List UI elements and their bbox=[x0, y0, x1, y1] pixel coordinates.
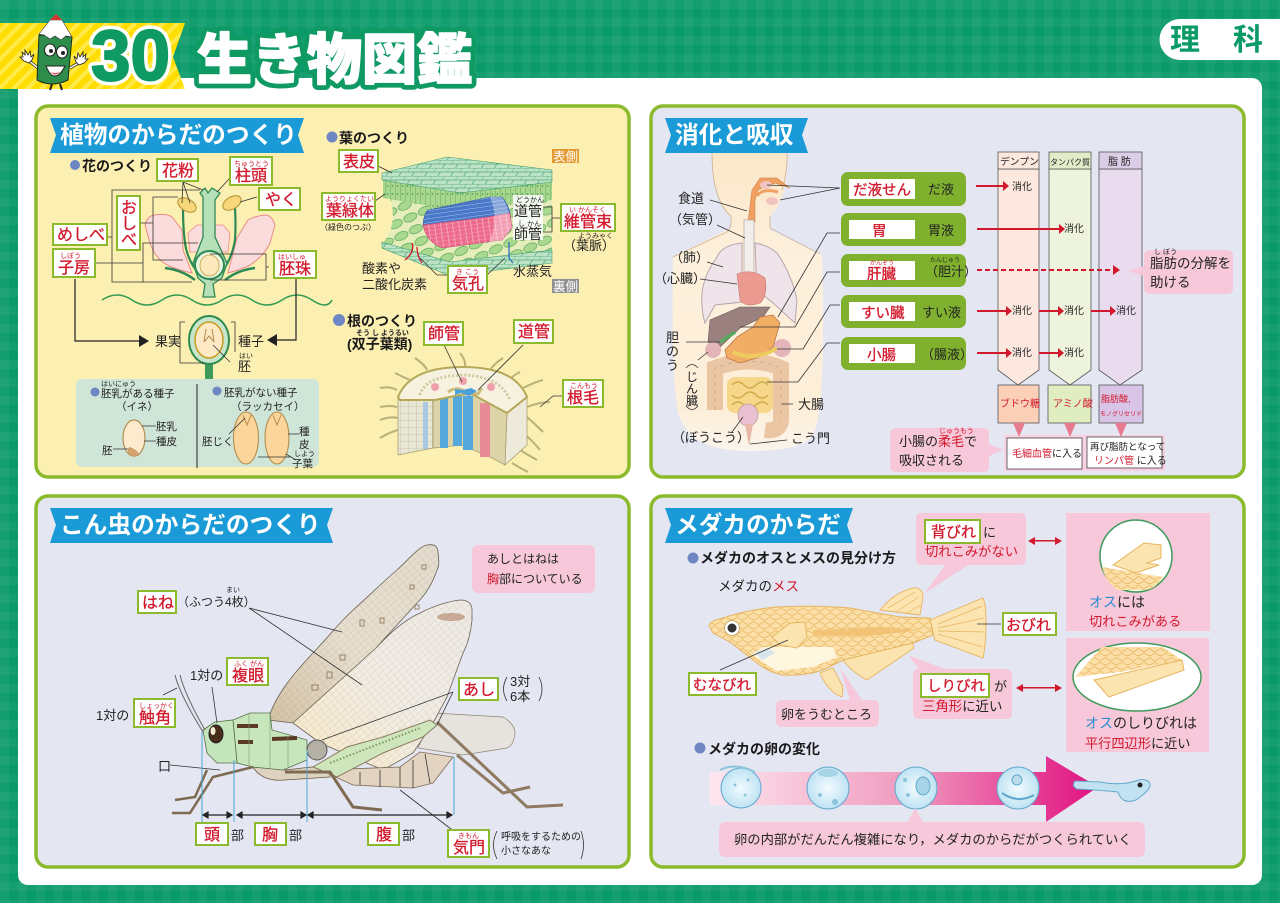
label: head segment: 部 bbox=[231, 828, 244, 843]
human body illustration bbox=[673, 153, 823, 451]
text: oxygen and CO2 bbox=[362, 261, 427, 292]
callout: egg laying spot: 卵をうむところ bbox=[781, 707, 872, 722]
column: starch bbox=[998, 152, 1040, 423]
subheading: leaf: 葉のつくり bbox=[339, 130, 409, 146]
column: fat: 脂 肪 bbox=[1108, 155, 1131, 168]
panel: seeds comparison: 胚 bbox=[102, 445, 113, 457]
label: wings bbox=[138, 591, 176, 613]
organ row: liver: かんぞう bbox=[870, 260, 894, 267]
text: usually four wings: まい bbox=[226, 586, 240, 594]
label: epidermis: 表皮 bbox=[343, 153, 375, 171]
text: kidney: 臓 bbox=[686, 394, 698, 408]
organ row: salivary glands: だ液 bbox=[928, 182, 954, 197]
icon: larva bbox=[1073, 780, 1150, 801]
label: tail fin: おびれ bbox=[1006, 617, 1051, 634]
label: ovule: 胚珠 bbox=[279, 260, 311, 278]
arrow: ovule to seed bbox=[267, 279, 296, 346]
absorption band bbox=[1004, 423, 1167, 471]
label: vascular bundle: い かんそく bbox=[569, 206, 606, 214]
wing: hind wing bbox=[293, 600, 472, 770]
callout: egg laying spot bbox=[776, 668, 879, 727]
text: phloem in leaf bbox=[513, 220, 543, 242]
callout: egg explanation bbox=[719, 808, 1145, 857]
callout: legs and wings: あしとはねは bbox=[487, 552, 559, 566]
callout: absorbed by villi: 小腸の柔毛で bbox=[899, 434, 977, 449]
label: stamen: お bbox=[121, 199, 137, 217]
text: gallbladder bbox=[666, 330, 679, 373]
number ribbon bbox=[0, 17, 185, 96]
callout: legs and wings: 胸部についている bbox=[487, 571, 583, 586]
label: stoma bbox=[448, 266, 487, 293]
column: fat: モノグリセリド bbox=[1100, 410, 1142, 418]
label: xylem bbox=[514, 320, 553, 343]
double arrow: anal fin comparison bbox=[1016, 684, 1062, 692]
fish illustration bbox=[709, 588, 986, 697]
text: female medaka: メダカのメス bbox=[718, 579, 799, 594]
text: digested marks: 消化 bbox=[1012, 180, 1032, 193]
subheading: root: 根のつくり bbox=[347, 313, 417, 329]
text: phloem in leaf: し かん bbox=[518, 220, 541, 228]
label: stoma: き こう bbox=[456, 268, 479, 276]
icon: egg stage 2 bbox=[807, 767, 849, 809]
text: digested marks: 消化 bbox=[1064, 304, 1084, 317]
label: head segment bbox=[196, 823, 244, 845]
text: gallbladder: の bbox=[666, 344, 679, 359]
panel: seeds comparison: 胚乳がない種子 bbox=[224, 386, 298, 399]
absorption band: 再び脂肪となって bbox=[1090, 441, 1165, 453]
text: esophagus: 食道 bbox=[678, 191, 704, 206]
label: epidermis bbox=[339, 150, 378, 172]
label: pectoral fin bbox=[689, 673, 756, 695]
callout: dorsal fin: に bbox=[983, 525, 996, 540]
label: ovule: はいしゅ bbox=[278, 253, 306, 261]
organ row: stomach: 胃液 bbox=[928, 223, 954, 238]
panel: seeds comparison: （イネ） bbox=[116, 401, 158, 413]
panel: plant structure bbox=[36, 106, 629, 477]
label: vascular bundle: 維管束 bbox=[564, 213, 612, 231]
tag: under side: 裏側 bbox=[553, 280, 578, 294]
text: three pairs, six legs: 3対 bbox=[510, 674, 530, 689]
text: digested marks: 消化 bbox=[1064, 346, 1084, 359]
organ row: liver: たんじゅう bbox=[930, 257, 960, 264]
heading: medaka bbox=[665, 508, 853, 543]
flower bracket lines bbox=[95, 178, 269, 282]
heading: insect: こん虫のからだのつくり bbox=[60, 512, 321, 539]
label: head segment: 頭 bbox=[204, 827, 220, 844]
label: thorax segment: 胸 bbox=[262, 826, 278, 844]
callout: helps break down fat: し ぼう bbox=[1154, 248, 1177, 256]
label: pistil: めしべ bbox=[57, 227, 105, 244]
text: xylem in leaf: 道管 bbox=[514, 203, 542, 219]
heading: plants: 植物のからだのつくり bbox=[60, 122, 297, 149]
label: stamen bbox=[117, 196, 140, 250]
text: digested marks bbox=[1012, 180, 1136, 359]
middle leg bbox=[285, 772, 382, 810]
label: legs: あし bbox=[463, 681, 495, 699]
panel: seeds comparison: （ラッカセイ） bbox=[231, 401, 304, 413]
icon: pencil mascot bbox=[20, 14, 88, 90]
label: abdomen segment: 腹 bbox=[376, 826, 392, 844]
label: stoma: 気孔 bbox=[452, 275, 484, 293]
label: spiracle: きもん bbox=[458, 832, 479, 840]
text: three pairs, six legs bbox=[504, 674, 542, 704]
text: one pair, eyes: 1対の bbox=[190, 668, 223, 683]
organ row: small intestine: （腸液） bbox=[921, 347, 973, 362]
title: 生き物図鑑 bbox=[197, 29, 472, 91]
text: usually four wings bbox=[177, 586, 256, 609]
label: pollen: 花粉 bbox=[162, 162, 194, 180]
panel: seeds comparison: 胚乳がある種子 bbox=[101, 387, 175, 400]
absorption band: 毛細血管に入る bbox=[1012, 447, 1082, 460]
label: stigma: ちゅうとう bbox=[234, 160, 269, 168]
column: protein bbox=[1048, 152, 1093, 423]
panel: seeds comparison: 胚乳 bbox=[156, 421, 177, 433]
label: chloroplast: 葉緑体 bbox=[326, 202, 374, 220]
heading: insect bbox=[50, 508, 333, 543]
label: thorax segment bbox=[255, 823, 302, 845]
callout: anal fin bbox=[908, 655, 1012, 719]
thorax and head bbox=[253, 765, 330, 780]
flower diagram bbox=[145, 188, 275, 297]
subheading: root: そう し ようるい bbox=[356, 328, 409, 337]
abdomen bbox=[320, 752, 453, 788]
label: abdomen segment: 部 bbox=[402, 828, 415, 843]
text: water vapor: 水蒸気 bbox=[513, 264, 552, 279]
label: phloem bbox=[424, 322, 463, 345]
callout: egg explanation: 卵の内部がだんだん複雑になり，メダカのからだがつくられていく bbox=[734, 831, 1132, 847]
callout: absorbed by villi bbox=[890, 427, 1003, 472]
callout: legs and wings bbox=[472, 545, 595, 593]
text: digested marks: 消化 bbox=[1064, 222, 1084, 235]
label: compound eye: 複眼 bbox=[232, 667, 264, 685]
icon: egg stage 4 bbox=[997, 767, 1039, 809]
text: one pair, antenna: 1対の bbox=[96, 708, 129, 723]
text: green grain: （緑色のつぶ） bbox=[320, 222, 376, 232]
organ row: liver bbox=[841, 254, 977, 287]
segment guide lines bbox=[202, 732, 454, 822]
label: compound eye: ふく がん bbox=[234, 659, 264, 668]
column: protein: タンパク質 bbox=[1050, 157, 1090, 167]
label: vascular bundle bbox=[561, 204, 615, 231]
label: spiracle bbox=[448, 830, 489, 857]
column: starch: ブドウ糖 bbox=[1000, 397, 1040, 410]
tag: upper side: 表側 bbox=[553, 150, 578, 164]
subheading: egg change: メダカの卵の変化 bbox=[708, 741, 820, 757]
fruit diagram bbox=[180, 316, 235, 379]
callout: dorsal fin bbox=[916, 513, 1026, 593]
callout: absorbed by villi: じゅうもう bbox=[939, 427, 974, 435]
label: spiracle: 気門 bbox=[453, 839, 485, 857]
arrow: egg development bbox=[710, 756, 1098, 822]
callout: helps break down fat: 助ける bbox=[1150, 275, 1190, 290]
panel: male anal fin: オスのしりびれは bbox=[1085, 715, 1197, 731]
text: digested marks: 消化 bbox=[1116, 304, 1136, 317]
column: starch: デンプン bbox=[1000, 155, 1039, 168]
label: antenna: しょっかく bbox=[139, 702, 174, 710]
organ row: liver: 肝臓 bbox=[867, 266, 896, 283]
subject tab: 科 bbox=[1233, 24, 1263, 57]
organ row: pancreas: すい臓 bbox=[861, 305, 905, 322]
double arrow: dorsal fin comparison bbox=[1028, 537, 1062, 545]
subheading: sexing: メダカのオスとメスの見分け方 bbox=[700, 550, 896, 566]
callout: helps break down fat bbox=[1128, 248, 1233, 294]
organ row: liver: （胆汁） bbox=[925, 264, 977, 279]
panel: male dorsal fin: オスには bbox=[1089, 594, 1145, 610]
panel: seeds comparison: はいにゅう bbox=[101, 380, 136, 388]
fish leader lines bbox=[720, 624, 1001, 670]
callout: dorsal fin: 背びれ bbox=[931, 524, 976, 541]
leaf cross section bbox=[382, 157, 552, 276]
text: large intestine: 大腸 bbox=[798, 397, 824, 412]
antenna bbox=[175, 675, 205, 732]
organ row: small intestine bbox=[841, 337, 973, 370]
subheading: flower: 花のつくり bbox=[82, 158, 152, 174]
text: heart: （心臓） bbox=[654, 271, 706, 286]
label: stamen: し bbox=[121, 216, 137, 233]
panel: digestion and absorption bbox=[651, 106, 1244, 477]
text: gallbladder: う bbox=[666, 358, 679, 373]
text: breathing hole bbox=[494, 831, 584, 859]
organ row: stomach: 胃 bbox=[872, 224, 886, 240]
text: breathing hole: 呼吸をするための bbox=[501, 831, 581, 843]
label: root hair bbox=[563, 380, 603, 407]
text: bladder: （ぼうこう） bbox=[672, 430, 750, 445]
subheading: root bbox=[333, 313, 417, 352]
text: gallbladder: 胆 bbox=[666, 330, 679, 345]
icon: rice seed bbox=[113, 420, 156, 456]
subject tab: 理 bbox=[1170, 24, 1200, 57]
heading: plants bbox=[50, 118, 304, 153]
root leader lines bbox=[444, 345, 562, 407]
panel: seeds comparison: 種 bbox=[299, 425, 310, 438]
panel: seeds comparison bbox=[76, 379, 319, 470]
icon: peanut seeds bbox=[229, 412, 299, 464]
label: thorax segment: 部 bbox=[289, 828, 302, 843]
text: embryo: はい bbox=[239, 352, 253, 360]
label: compound eye bbox=[227, 658, 268, 685]
panel: seeds comparison: しよう bbox=[294, 450, 315, 458]
insect leader lines bbox=[163, 608, 485, 855]
number ribbon: 30 bbox=[91, 17, 170, 96]
label: anther: やく bbox=[265, 191, 297, 209]
text: embryo bbox=[238, 352, 253, 374]
heading: digestion bbox=[665, 118, 808, 153]
text: kidney: ん bbox=[686, 382, 698, 396]
label: antenna: 触角 bbox=[139, 709, 171, 727]
label: antenna bbox=[134, 699, 175, 727]
text: trachea: （気管） bbox=[669, 212, 721, 227]
organ row: pancreas: すい液 bbox=[922, 305, 961, 320]
leaf leader lines bbox=[375, 166, 560, 275]
text: xylem in leaf: どうかん bbox=[516, 196, 544, 204]
wing: back hind wing bbox=[418, 713, 515, 755]
icon: egg stage 1 bbox=[720, 766, 761, 808]
callout: anal fin: しりびれ bbox=[927, 678, 985, 695]
wavy divider bbox=[102, 295, 332, 305]
hind leg bbox=[313, 720, 437, 777]
root diagram bbox=[380, 353, 550, 472]
label: wings: はね bbox=[142, 594, 174, 612]
text: kidney: じ bbox=[686, 370, 698, 384]
text: xylem in leaf bbox=[513, 195, 544, 223]
label: phloem: 師管 bbox=[428, 325, 460, 343]
text: kidney bbox=[686, 364, 698, 410]
organ row: salivary glands: だ液せん bbox=[853, 182, 911, 199]
text: oxygen and CO2: 二酸化炭素 bbox=[362, 277, 427, 292]
callout: anal fin: 三角形に近い bbox=[922, 699, 1002, 714]
heading: digestion: 消化と吸収 bbox=[675, 122, 794, 149]
panel: medaka body bbox=[651, 496, 1244, 867]
number ribbon: 30 bbox=[91, 17, 170, 96]
column: fat bbox=[1099, 152, 1143, 423]
column: fat: 脂肪酸, bbox=[1101, 393, 1131, 404]
text: mouth: 口 bbox=[158, 759, 171, 774]
label: xylem: 道管 bbox=[518, 323, 550, 341]
label: root hair: 根毛 bbox=[567, 389, 599, 407]
absorption band: リンパ管 に入る bbox=[1094, 454, 1167, 467]
label: ovary: しぼう bbox=[60, 252, 81, 260]
text: lung: （肺） bbox=[670, 250, 709, 265]
title: 生き物図鑑 bbox=[197, 29, 472, 91]
text: digested marks: 消化 bbox=[1012, 304, 1032, 317]
label: ovary bbox=[53, 249, 95, 277]
arrow: ovary to fruit bbox=[75, 279, 149, 347]
text: breathing hole: 小さなあな bbox=[501, 845, 551, 857]
text: seed: 種子 bbox=[238, 334, 264, 349]
callout: anal fin: が bbox=[994, 679, 1007, 694]
heading: medaka: メダカのからだ bbox=[675, 511, 841, 539]
text: oxygen and CO2: 酸素や bbox=[362, 261, 401, 276]
text: phloem in leaf: 師管 bbox=[514, 226, 542, 242]
label: anther bbox=[259, 188, 300, 210]
column: protein: アミノ酸 bbox=[1053, 397, 1093, 410]
text: anus: こう門 bbox=[791, 431, 830, 446]
panel: seeds comparison: 種皮 bbox=[156, 435, 177, 448]
label: chloroplast bbox=[322, 193, 375, 220]
label: pollen bbox=[157, 159, 198, 181]
panel: seeds comparison: 胚じく bbox=[202, 436, 234, 448]
panel: insect structure bbox=[36, 496, 629, 867]
icon: egg stage 3 bbox=[895, 767, 937, 809]
organ row: stomach bbox=[841, 213, 966, 246]
panel: male anal fin bbox=[1066, 638, 1209, 752]
label: root hair: こんもう bbox=[570, 382, 598, 390]
organ row: salivary glands bbox=[841, 172, 966, 206]
label: stamen: べ bbox=[121, 232, 137, 249]
arrows: body segments bbox=[203, 812, 452, 818]
subject tab bbox=[1160, 19, 1280, 60]
fore legs bbox=[172, 767, 253, 813]
text: three pairs, six legs: 6本 bbox=[510, 689, 530, 704]
text: embryo: 胚 bbox=[238, 359, 251, 374]
label: stigma: 柱頭 bbox=[235, 167, 267, 185]
arrows: digestion flow bbox=[976, 181, 1120, 358]
callout: absorbed by villi: 吸収される bbox=[899, 453, 964, 468]
grasshopper illustration bbox=[172, 545, 563, 813]
label: ovule bbox=[274, 251, 316, 278]
text: usually four wings: （ふつう4枚） bbox=[177, 594, 256, 609]
text: leaf vein: ようみゃく bbox=[578, 232, 613, 240]
label: ovary: 子房 bbox=[58, 259, 90, 277]
text: leaf vein: （葉脈） bbox=[563, 238, 615, 253]
label: abdomen segment bbox=[368, 823, 415, 845]
label: tail fin bbox=[1003, 613, 1056, 635]
label: legs bbox=[459, 678, 498, 700]
callout: helps break down fat: 脂肪の分解を bbox=[1150, 256, 1231, 271]
organ row: pancreas bbox=[841, 295, 966, 328]
panel: male dorsal fin: 切れこみがある bbox=[1089, 614, 1181, 629]
organ row: small intestine: 小腸 bbox=[867, 347, 896, 364]
text: fruit: 果実 bbox=[155, 334, 181, 349]
subheading: root: (双子葉類) bbox=[347, 336, 412, 352]
label: chloroplast: ようりょくたい bbox=[325, 195, 374, 203]
label: stigma bbox=[230, 157, 272, 185]
label: pectoral fin: むなびれ bbox=[693, 677, 751, 694]
panel: male dorsal fin bbox=[1066, 513, 1210, 631]
digestion leader lines bbox=[686, 185, 840, 444]
panel: male anal fin: 平行四辺形に近い bbox=[1085, 736, 1190, 751]
callout: dorsal fin: 切れこみがない bbox=[925, 544, 1018, 559]
text: digested marks: 消化 bbox=[1012, 346, 1032, 359]
panel: seeds comparison: 子葉 bbox=[292, 457, 313, 470]
wing: forewing bbox=[268, 545, 439, 723]
panel: seeds comparison: 皮 bbox=[299, 438, 310, 451]
